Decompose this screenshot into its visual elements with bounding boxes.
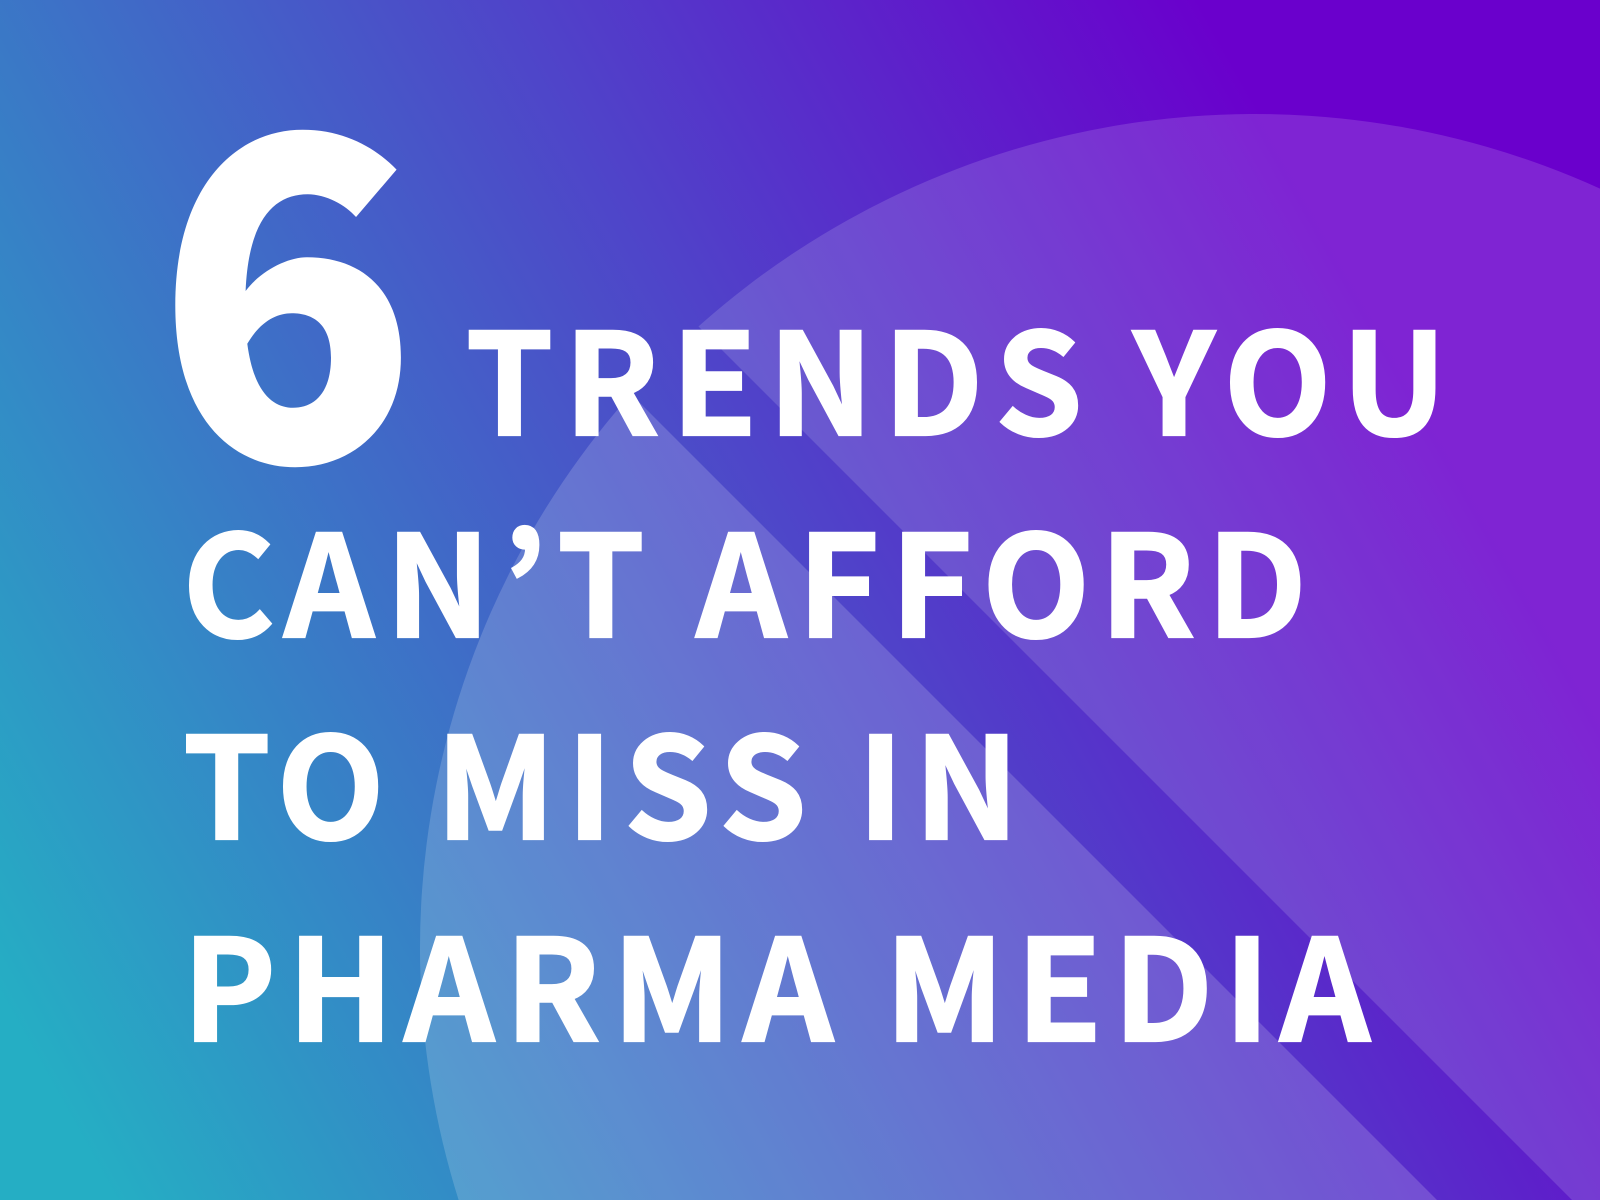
title line 2: CAN’TAFFORD xyxy=(182,475,1307,678)
decorative circle overlay with diagonal band xyxy=(420,114,1600,1200)
title line 1: TRENDSYOU xyxy=(466,273,1447,476)
title line 4: PHARMAMEDIA xyxy=(182,879,1371,1082)
title xyxy=(156,0,1447,1082)
title line 3: TOMISSIN xyxy=(183,677,1019,880)
